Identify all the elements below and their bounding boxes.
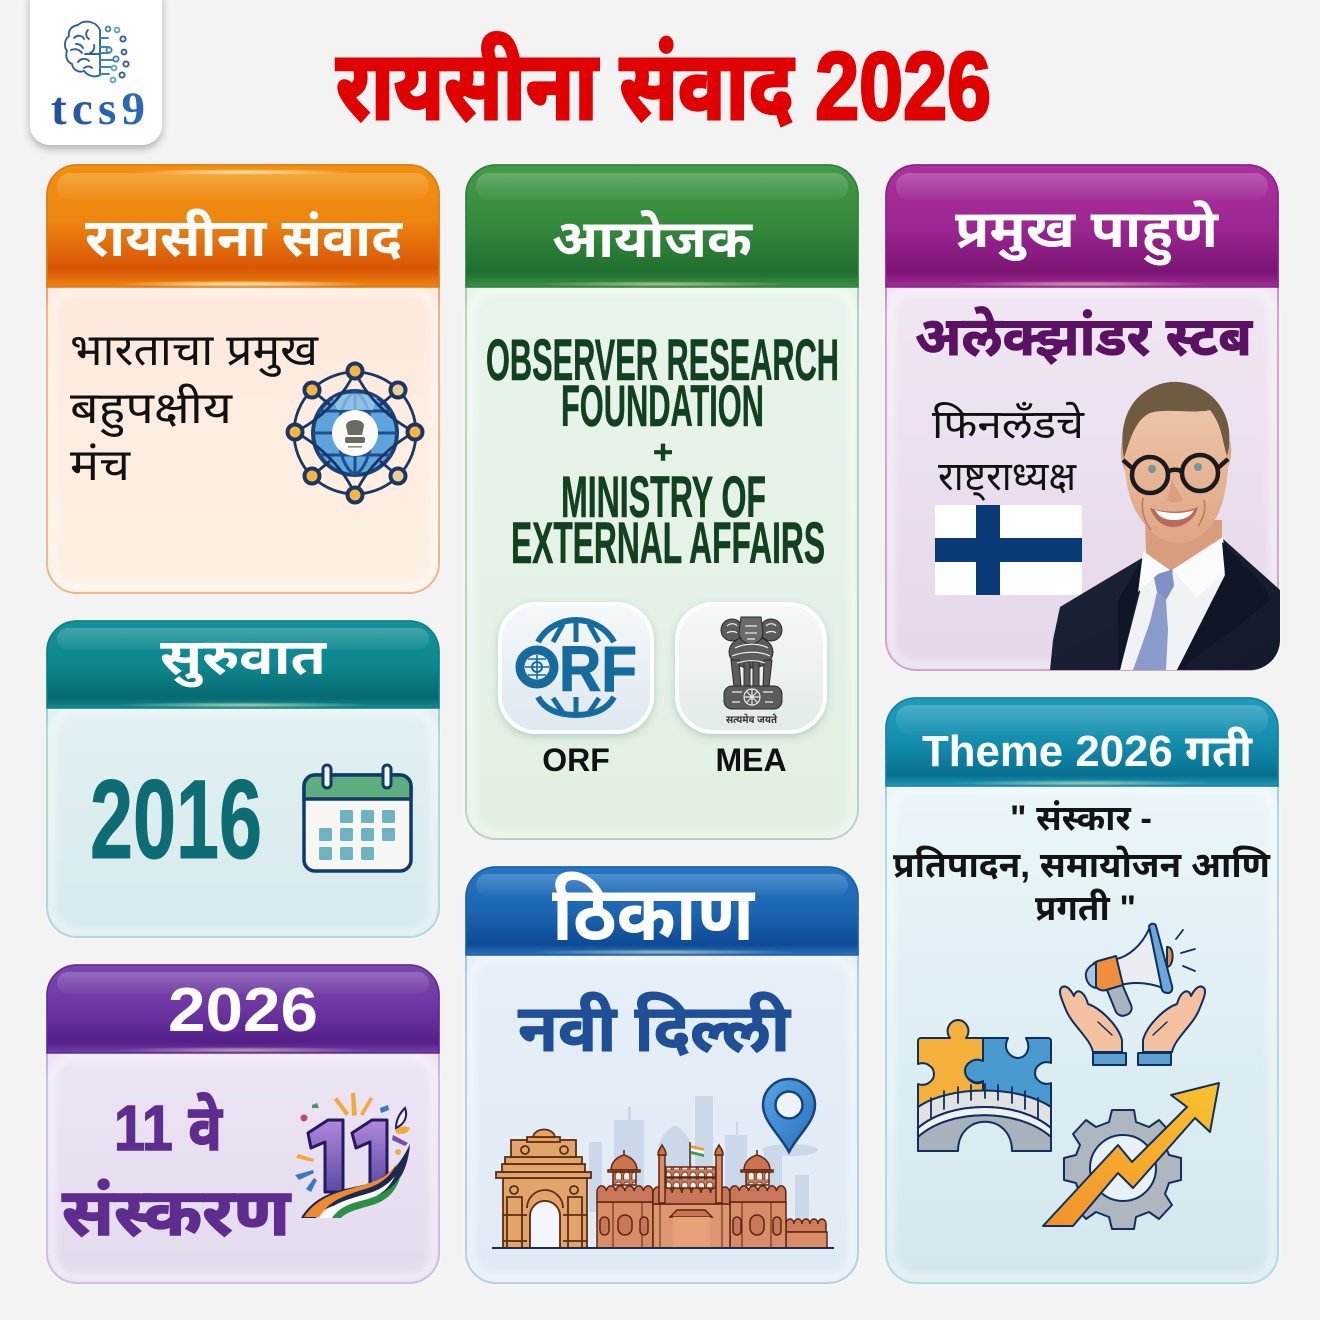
panel: 2026 edition <box>47 965 439 1283</box>
panel header: cyan <box>886 698 1278 786</box>
text block: बहुपक्षीय <box>70 383 234 437</box>
guest name: अलेक्झांडर स्टब <box>915 306 1254 367</box>
icon: megaphone in hands <box>1060 924 1205 1065</box>
theme quote: प्रतिपादन, समायोजन आणि <box>893 845 1271 885</box>
organisers text: FOUNDATION <box>561 374 764 439</box>
logo card: tcs9 <box>30 0 162 145</box>
icon: gear with rising arrow <box>1043 1083 1219 1229</box>
heading: Theme 2026 गती <box>922 726 1253 776</box>
organisers text <box>486 328 839 576</box>
heading: आयोजक <box>552 211 753 269</box>
panel header: teal <box>47 621 439 708</box>
heading: 2026 <box>168 976 318 1045</box>
panel header: blue <box>466 867 858 957</box>
guest role: फिनलँडचे <box>932 401 1085 447</box>
panel header: magenta <box>886 165 1278 287</box>
portrait photo <box>1050 382 1280 670</box>
ground line <box>492 1247 834 1249</box>
logo tile: ORF <box>500 604 652 732</box>
text block: भारताचा प्रमुख <box>70 326 319 378</box>
skyline <box>589 1096 818 1223</box>
edition text: 11 वे <box>114 1092 223 1164</box>
text block: मंच <box>70 441 131 490</box>
organisers text: MINISTRY OF <box>561 465 766 530</box>
heading: रायसीना संवाद <box>85 208 403 268</box>
year 2016: 2016 <box>90 757 262 882</box>
icon: number 11 with tricolour <box>295 1093 410 1218</box>
panel header: purple <box>47 965 439 1053</box>
guest role: राष्ट्राध्यक्ष <box>938 455 1077 501</box>
icon: Red Fort <box>597 1142 827 1248</box>
logo wordmark: tcs9 <box>51 83 145 135</box>
text block <box>70 326 319 490</box>
title: रायसीना संवाद 2026 <box>336 33 991 140</box>
organisers text: OBSERVER RESEARCH <box>486 328 839 393</box>
organisers text: + <box>653 434 673 470</box>
logo tile: MEA emblem <box>677 604 825 732</box>
edition text: संस्करण <box>62 1175 292 1249</box>
guest role <box>932 401 1085 501</box>
icon: puzzle and bridge <box>918 1020 1051 1151</box>
panel: Theme 2026 गती <box>886 698 1278 1283</box>
heading: सुरुवात <box>160 629 327 689</box>
theme quote: प्रगती " <box>1035 888 1136 928</box>
organisers text: EXTERNAL AFFAIRS <box>511 511 825 576</box>
icon: India Gate <box>496 1130 591 1248</box>
icon: brain circuit <box>65 22 129 82</box>
label: ORF: ORF <box>542 742 610 778</box>
panel: सुरुवात <box>47 621 439 937</box>
icon: globe network <box>288 364 422 502</box>
icon: calendar <box>304 765 411 871</box>
label: MEA: MEA <box>715 742 787 778</box>
panel: रायसीना संवाद <box>47 165 439 593</box>
panel header: green <box>466 165 858 287</box>
panel header: orange <box>47 165 439 288</box>
theme quote <box>893 799 1271 928</box>
panel: प्रमुख पाहुणे <box>886 165 1280 670</box>
panel: ठिकाण <box>466 867 858 1283</box>
panel: आयोजक <box>466 165 858 839</box>
theme quote: " संस्कार - <box>1010 799 1152 838</box>
logo tile: MEA emblem: सत्यमेव जयते <box>726 713 778 726</box>
edition text <box>62 1092 292 1249</box>
heading: प्रमुख पाहुणे <box>955 200 1219 266</box>
heading: ठिकाण <box>552 872 756 957</box>
icon: location pin <box>763 1079 815 1152</box>
location text: नवी दिल्ली <box>518 991 792 1065</box>
flag of Finland <box>935 505 1082 595</box>
logo tile: ORF: RF <box>559 633 637 705</box>
